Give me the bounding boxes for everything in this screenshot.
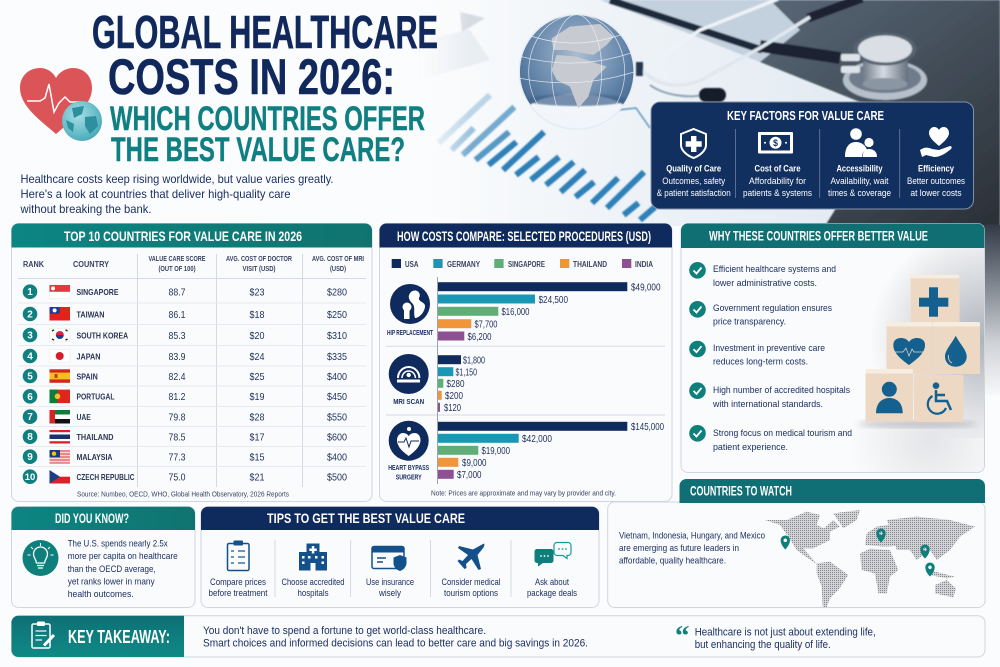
- reason 2: Government regulation ensures: [713, 303, 832, 314]
- tip: medical tourism: Consider medical: [442, 577, 500, 588]
- tip: accredited hospitals: hospitals: [298, 588, 329, 599]
- group: hip replacement: $24,500: [538, 294, 568, 306]
- icon: hip joint: [390, 284, 430, 324]
- panel: top 10 countries table: [12, 224, 372, 502]
- table column headers: RANK: [23, 260, 44, 269]
- row: Spain: 5: [27, 372, 33, 382]
- block: person: [866, 369, 913, 422]
- group: hip replacement: $16,000: [502, 306, 530, 318]
- factor: quality of care: Quality of Care: [666, 164, 721, 174]
- group: heart bypass surgery: $7,000: [457, 469, 482, 481]
- row: Japan: JAPAN: [76, 351, 100, 361]
- light tube: [640, 17, 810, 85]
- row: Thailand: $17: [250, 432, 265, 444]
- icon: clipboard with pen: [32, 622, 54, 648]
- row: South Korea: 3: [27, 330, 33, 342]
- watch text: Vietnam, Indonesia, Hungary, and Mexico: [619, 530, 765, 542]
- block: water drop: [933, 322, 980, 374]
- row: Malaysia: [23, 449, 347, 464]
- tip: accredited hospitals: [282, 544, 344, 599]
- icon: MRI scanner: [389, 354, 429, 394]
- row: Portugal: 81.2: [168, 391, 186, 403]
- factor: quality of care: & patient satisfaction: [657, 188, 731, 198]
- row: Thailand: 78.5: [168, 432, 186, 444]
- row: Czech Republic: 75.0: [168, 472, 186, 484]
- row: South Korea: $310: [327, 330, 347, 342]
- reason 2: price transparency.: [713, 316, 786, 328]
- icon: banknote: [758, 132, 793, 154]
- row: Portugal: 6: [27, 392, 33, 403]
- bypass label: [388, 465, 429, 482]
- title: GLOBAL HEALTHCARE: [92, 6, 438, 58]
- block: cross: [911, 275, 959, 326]
- tip: medical tourism: tourism options: [444, 588, 498, 599]
- row: Singapore: $280: [327, 286, 347, 298]
- factor: cost of care: Affordability for: [749, 176, 806, 186]
- did you know text: yet ranks lower in many: [68, 576, 155, 588]
- factor: quality of care: [657, 164, 731, 198]
- group: hip replacement: $49,000: [631, 282, 661, 294]
- key takeaway text: You don't have to spend a fortune to get world-class healthcare.: [203, 625, 486, 637]
- watch text: [619, 530, 765, 566]
- bypass label: SURGERY: [396, 474, 422, 482]
- row: Singapore: SINGAPORE: [76, 287, 119, 297]
- tip: package deals: [527, 542, 577, 599]
- factor: cost of care: Cost of Care: [754, 164, 800, 174]
- dotted world map: [765, 510, 975, 607]
- group: heart bypass surgery: $145,000: [631, 421, 664, 433]
- row: Malaysia: $400: [327, 452, 347, 464]
- row: Czech Republic: $21: [250, 472, 265, 484]
- table column headers: [23, 256, 364, 273]
- reason 1: [689, 262, 836, 289]
- chart legend: THAILAND: [573, 260, 607, 269]
- table column headers: (OUT OF 100): [158, 266, 196, 273]
- tips heading: TIPS TO GET THE BEST VALUE CARE: [267, 510, 465, 526]
- panel: countries to watch: [608, 479, 985, 608]
- group: hip replacement: $6,200: [468, 331, 492, 343]
- reason 3: Investment in preventive care: [713, 343, 825, 354]
- row: Czech Republic: [23, 469, 347, 484]
- icon: card with shield: [372, 546, 406, 571]
- row: Taiwan: $250: [327, 309, 347, 321]
- group: hip replacement: $7,700: [474, 318, 498, 330]
- dark tube: [610, 0, 762, 50]
- quote text: Healthcare is not just about extending life,: [695, 626, 876, 638]
- reason 3: reduces long-term costs.: [713, 356, 808, 368]
- row: Japan: $24: [250, 351, 265, 363]
- reason 2: [689, 301, 832, 328]
- group: MRI scan: $200: [445, 390, 463, 402]
- factor: efficiency: Better outcomes: [907, 176, 965, 186]
- panel: tips to get the best value care: [201, 507, 599, 608]
- row: UAE: 79.8: [168, 412, 186, 424]
- reason 1: lower administrative costs.: [713, 278, 817, 289]
- reason 5: [689, 425, 852, 453]
- row: Malaysia: MALAYSIA: [76, 452, 112, 462]
- factor: cost of care: [743, 164, 812, 198]
- key takeaway text: [203, 625, 588, 650]
- row: Japan: [23, 349, 347, 363]
- chart note: Note: Prices are approximate and may vary by provider and city.: [431, 489, 616, 498]
- reason 5: Strong focus on medical tourism and: [713, 428, 852, 439]
- factor: accessibility: Accessibility: [836, 164, 882, 174]
- chart legend: USA: [405, 260, 419, 269]
- group: MRI scan: [389, 354, 485, 414]
- row: Portugal: $450: [327, 391, 347, 403]
- row: Taiwan: [23, 307, 347, 321]
- title: [92, 6, 438, 169]
- map pin: Hungary: [876, 528, 886, 542]
- tip: package deals: Ask about: [535, 577, 569, 588]
- factor: accessibility: Availability, wait: [830, 176, 889, 186]
- tip: package deals: package deals: [527, 588, 577, 599]
- row: South Korea: $20: [250, 330, 265, 342]
- icon: banknote: $: [773, 138, 778, 148]
- intro text: Healthcare costs keep rising worldwide, but value varies greatly.: [20, 172, 334, 186]
- table column headers: AVG. COST OF MRI: [312, 256, 364, 263]
- key takeaway label: KEY TAKEAWAY:: [68, 627, 170, 647]
- row: Japan: 4: [27, 352, 33, 362]
- did you know text: [68, 538, 178, 600]
- row: Thailand: [23, 429, 347, 444]
- reason 5: patient experience.: [713, 442, 788, 453]
- right margin photo fade: [984, 225, 1000, 395]
- tip: insurance: Use insurance: [366, 577, 414, 588]
- group: MRI scan: $1,800: [463, 354, 485, 366]
- row: Taiwan: 86.1: [168, 309, 186, 321]
- did you know text: more per capita on healthcare: [68, 551, 178, 562]
- glass globe: [518, 14, 634, 130]
- did you know text: than the OECD average,: [68, 564, 156, 575]
- table column headers: (USD): [330, 266, 346, 273]
- chart legend: INDIA: [635, 260, 653, 269]
- quote text: [695, 626, 876, 651]
- factor: efficiency: [907, 164, 965, 198]
- row: Malaysia: 9: [27, 452, 33, 463]
- group: heart bypass surgery: $19,000: [482, 445, 510, 457]
- watch text: affordable, quality healthcare.: [619, 556, 726, 566]
- row: Portugal: PORTUGAL: [76, 392, 114, 402]
- icon: checklist: [228, 540, 249, 570]
- quotation mark: “: [675, 620, 690, 652]
- group: heart bypass surgery: $42,000: [522, 433, 552, 445]
- block: heart: [886, 322, 932, 374]
- row: Czech Republic: 10: [25, 472, 35, 483]
- panel: key factors for value care: [651, 102, 974, 209]
- icon: shield: [681, 129, 706, 158]
- table heading: TOP 10 COUNTRIES FOR VALUE CARE IN 2026: [64, 228, 302, 244]
- chart legend: [392, 259, 653, 269]
- reason 4: High number of accredited hospitals: [713, 385, 850, 396]
- icon: heart in hand: [920, 127, 952, 157]
- map pin: Vietnam: [920, 544, 930, 558]
- map pin: Mexico: [781, 536, 790, 550]
- reason 4: [689, 382, 850, 410]
- row: Japan: $335: [327, 351, 347, 363]
- row: Spain: [23, 369, 347, 383]
- reason 4: with international standards.: [712, 399, 823, 410]
- row: Japan: 83.9: [168, 351, 186, 363]
- panel: key takeaway: [12, 616, 985, 657]
- row: UAE: [23, 409, 347, 424]
- row: UAE: 7: [27, 412, 33, 423]
- row: Czech Republic: $500: [327, 472, 347, 484]
- group: heart bypass surgery: $9,000: [462, 457, 487, 469]
- did you know heading: DID YOU KNOW?: [55, 510, 129, 526]
- icon: chat bubbles: [534, 542, 571, 566]
- row: Thailand: $600: [327, 432, 347, 444]
- group: MRI scan: $280: [446, 378, 465, 390]
- reason 1: Efficient healthcare systems and: [713, 264, 836, 275]
- block: wheelchair: [914, 375, 964, 422]
- row: Portugal: [23, 389, 347, 404]
- icon: people: [845, 128, 877, 157]
- table column headers: VALUE CARE SCORE: [148, 256, 206, 263]
- chart bars: [438, 95, 655, 220]
- row: Malaysia: 77.3: [168, 452, 186, 464]
- did you know text: health outcomes.: [68, 589, 134, 600]
- did you know text: The U.S. spends nearly 2.5x: [68, 538, 168, 550]
- factor: efficiency: at lower costs: [910, 188, 962, 198]
- table column headers: VISIT (USD): [242, 266, 276, 273]
- tip: medical tourism: [442, 544, 500, 599]
- table column headers: AVG. COST OF DOCTOR: [226, 256, 292, 263]
- group: hip replacement: HIP REPLACEMENT: [387, 330, 433, 337]
- panel: did you know: [12, 507, 195, 608]
- row: Portugal: $19: [250, 391, 265, 403]
- row: UAE: UAE: [76, 412, 91, 422]
- intro text: Here's a look at countries that deliver high-quality care: [20, 187, 291, 201]
- bypass label: HEART BYPASS: [388, 465, 429, 472]
- chart legend: GERMANY: [447, 260, 481, 269]
- icon: heart with pulse: [389, 421, 429, 461]
- quote text: but enhancing the quality of life.: [695, 639, 831, 651]
- title: WHICH COUNTRIES OFFER: [110, 100, 425, 138]
- row: Singapore: [23, 284, 347, 299]
- icon: light bulb: [22, 540, 58, 576]
- row: South Korea: 85.3: [168, 330, 186, 342]
- chart legend: SINGAPORE: [508, 260, 546, 269]
- group: MRI scan: $1,150: [456, 366, 477, 378]
- row: Taiwan: $18: [250, 309, 265, 321]
- row: Malaysia: $15: [250, 452, 265, 464]
- reason 3: [689, 341, 825, 368]
- tip: insurance: [366, 546, 414, 599]
- group: hip replacement: [387, 282, 661, 343]
- title: THE BEST VALUE CARE?: [111, 131, 405, 169]
- key takeaway text: Smart choices and informed decisions can lead to better care and big savings in 2026.: [203, 638, 588, 650]
- title: COSTS IN 2026:: [108, 49, 395, 105]
- group: MRI scan: MRI SCAN: [393, 399, 424, 406]
- table column headers: COUNTRY: [73, 260, 110, 269]
- row: Thailand: 8: [27, 432, 33, 443]
- row: UAE: $28: [250, 412, 265, 424]
- row: Spain: $400: [327, 371, 347, 383]
- watch heading: COUNTRIES TO WATCH: [690, 483, 792, 499]
- map pin: Indonesia: [925, 562, 935, 576]
- row: Singapore: 88.7: [168, 286, 186, 298]
- key factors heading: KEY FACTORS FOR VALUE CARE: [727, 109, 884, 123]
- row: Spain: SPAIN: [76, 371, 98, 381]
- tip: accredited hospitals: Choose accredited: [282, 577, 344, 588]
- icon: wooden health blocks: [858, 275, 980, 428]
- icon: hospital: [299, 544, 327, 570]
- row: Singapore: 1: [27, 287, 33, 298]
- intro text: without breaking the bank.: [20, 202, 152, 216]
- row: South Korea: [23, 328, 347, 342]
- panel: why these countries offer better value: [681, 224, 984, 472]
- chest piece: [843, 60, 927, 100]
- row: UAE: $550: [327, 412, 347, 424]
- factor: cost of care: patients & systems: [743, 188, 812, 198]
- chart heading: HOW COSTS COMPARE: SELECTED PROCEDURES (USD): [397, 228, 651, 244]
- icon: airplane: [458, 544, 484, 570]
- group: heart bypass surgery: [388, 421, 664, 482]
- row: South Korea: SOUTH KOREA: [76, 330, 128, 340]
- row: Spain: $25: [250, 371, 265, 383]
- factor: quality of care: Outcomes, safety: [662, 176, 726, 186]
- row: Czech Republic: CZECH REPUBLIC: [76, 472, 134, 482]
- factor: efficiency: Efficiency: [918, 164, 954, 174]
- row: Thailand: THAILAND: [76, 432, 114, 442]
- factor: accessibility: [828, 164, 891, 198]
- tip: compare prices: [208, 540, 268, 599]
- factor: accessibility: times & coverage: [828, 188, 891, 198]
- tip: insurance: wisely: [378, 588, 401, 599]
- header photo: globe, stethoscope and charts: [420, 0, 1000, 226]
- watch text: are emerging as future leaders in: [619, 543, 739, 554]
- panel: procedure cost comparison chart: [380, 224, 672, 502]
- intro text: [20, 172, 334, 216]
- group: MRI scan: $120: [444, 402, 461, 414]
- icon: heart with globe: [20, 68, 102, 141]
- tip: compare prices: before treatment: [208, 588, 268, 599]
- table source: Source: Numbeo, OECD, WHO, Global Health Observatory, 2026 Reports: [77, 490, 289, 498]
- row: Taiwan: 2: [27, 310, 33, 320]
- tip: compare prices: Compare prices: [210, 577, 266, 588]
- row: Spain: 82.4: [168, 371, 186, 383]
- row: Singapore: $23: [250, 286, 265, 298]
- row: Taiwan: TAIWAN: [76, 309, 104, 319]
